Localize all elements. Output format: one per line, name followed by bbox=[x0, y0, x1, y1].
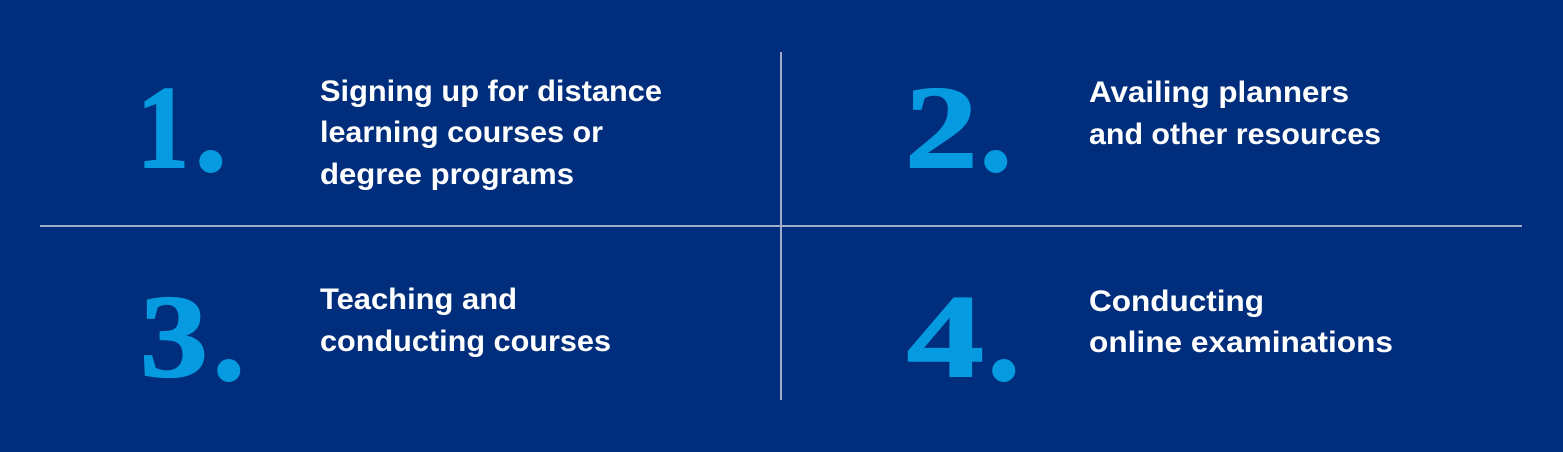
number 4: 4 bbox=[907, 271, 984, 402]
text: step 1 description: Signing up for distance bbox=[320, 75, 662, 108]
number 4 bbox=[907, 253, 1022, 411]
text: step 1 description: learning courses or bbox=[320, 116, 603, 149]
text: step 4 description: Conducting bbox=[1089, 285, 1264, 318]
text: step 3 description bbox=[320, 283, 611, 358]
number 4: . bbox=[986, 253, 1022, 411]
number 3 bbox=[140, 253, 246, 411]
text: step 4 description: online examinations bbox=[1089, 326, 1393, 359]
number 2 bbox=[905, 44, 1014, 202]
text: step 2 description: and other resources bbox=[1089, 118, 1381, 151]
number 2: 2 bbox=[905, 62, 978, 193]
text: step 3 description: Teaching and bbox=[320, 283, 517, 316]
number 1: . bbox=[193, 44, 228, 202]
number 3: 3 bbox=[140, 271, 208, 402]
number 1: 1 bbox=[137, 63, 189, 194]
number 1 bbox=[137, 44, 228, 202]
number 2: . bbox=[978, 44, 1014, 202]
panel: step 3 bbox=[140, 253, 611, 411]
number 3: . bbox=[211, 253, 246, 411]
panel: step 1 bbox=[137, 44, 662, 202]
text: step 3 description: conducting courses bbox=[320, 325, 611, 358]
text: step 4 description bbox=[1089, 285, 1393, 359]
panel: step 4 bbox=[907, 253, 1393, 411]
text: step 1 description bbox=[320, 75, 662, 191]
text: step 1 description: degree programs bbox=[320, 158, 574, 191]
text: step 2 description: Availing planners bbox=[1089, 76, 1349, 109]
text: step 2 description bbox=[1089, 76, 1381, 151]
panel: step 2 bbox=[905, 44, 1381, 202]
